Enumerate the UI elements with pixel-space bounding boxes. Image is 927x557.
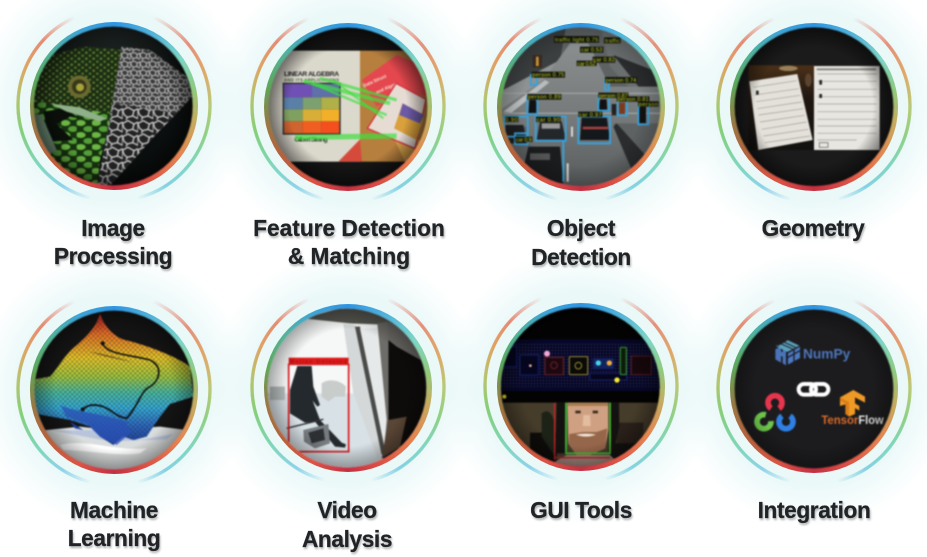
label: Object [547, 215, 615, 241]
label: Machine [70, 496, 158, 522]
icon: numpy logo [775, 340, 851, 365]
image: street with detection boxes [501, 26, 662, 187]
image: library logos [734, 308, 894, 470]
label: Geometry [762, 215, 864, 241]
cars [580, 117, 610, 140]
image: motion detection scene: Motion Detected [290, 359, 347, 365]
label [531, 215, 632, 270]
image: document perspective correction [734, 26, 894, 187]
image: street with detection boxes: car 0.9 [516, 137, 532, 143]
image: street with detection boxes: car 0.90 [537, 117, 560, 123]
panel: object detection [483, 18, 679, 270]
label: Integration [758, 496, 870, 522]
image: street with detection boxes: 0.90 [505, 117, 518, 123]
image: lizard photo and edge map [33, 26, 194, 186]
panel: GUI tools [483, 298, 679, 523]
image: street with detection boxes: person 0.89 [528, 95, 561, 101]
image: street with detection boxes: car 0.97 [579, 112, 602, 118]
panel: machine learning [16, 302, 212, 554]
icon: numpy logo: NumPy [803, 347, 851, 362]
panel: geometry [716, 18, 912, 244]
label: Analysis [302, 526, 392, 552]
panel: feature detection and matching [250, 18, 446, 272]
icon: tensorflow logo: Flow [858, 413, 884, 427]
label: Processing [54, 243, 172, 269]
image: book feature matching [268, 26, 428, 188]
image: street with detection boxes: person [639, 102, 658, 108]
icon: chain link [799, 384, 828, 395]
label: Video [317, 497, 377, 523]
panel: integration [716, 300, 912, 526]
label [253, 214, 446, 272]
image: street with detection boxes: person 0.74 [606, 78, 636, 84]
image: book feature matching: Data Struct [362, 73, 388, 88]
icon: opencv logo [757, 396, 793, 429]
panel: image processing [16, 18, 212, 272]
label [302, 497, 394, 556]
icon: tensorflow logo [821, 390, 884, 427]
label [54, 214, 174, 272]
image: book feature matching: LINEAR ALGEBRA [284, 71, 339, 78]
icon: tensorflow logo: Tensor [821, 413, 859, 427]
image: street with detection boxes: car 0.82 [593, 58, 615, 64]
image: street with detection boxes: car 0.52 [577, 61, 596, 67]
label: Detection [531, 244, 631, 270]
label: & Matching [288, 243, 410, 269]
label: GUI Tools [530, 497, 632, 523]
image: pacman doodle and face tracking [500, 306, 661, 468]
panel: video analysis [250, 300, 446, 556]
image: street with detection boxes: person 0.81 [617, 97, 649, 103]
image: street with detection boxes: person 0.87 [599, 93, 628, 99]
label: Feature Detection [253, 214, 445, 240]
image: street with detection boxes: traffic light 0.75 [555, 37, 598, 43]
image: street with detection boxes: car 0.53 [581, 48, 602, 54]
label: Learning [68, 525, 160, 551]
label: Image [81, 214, 145, 240]
image: motion detection scene [266, 308, 428, 468]
image: street with detection boxes: traffic [605, 38, 620, 44]
image: book feature matching: Gilbert Strang [294, 136, 328, 143]
image: loss surface [34, 310, 194, 470]
image: book feature matching: and Algor [375, 82, 397, 95]
image: book feature matching: AND ITS APPLICATIONS [284, 77, 339, 82]
image: street with detection boxes: person 0.75 [532, 73, 564, 79]
label [68, 496, 162, 554]
